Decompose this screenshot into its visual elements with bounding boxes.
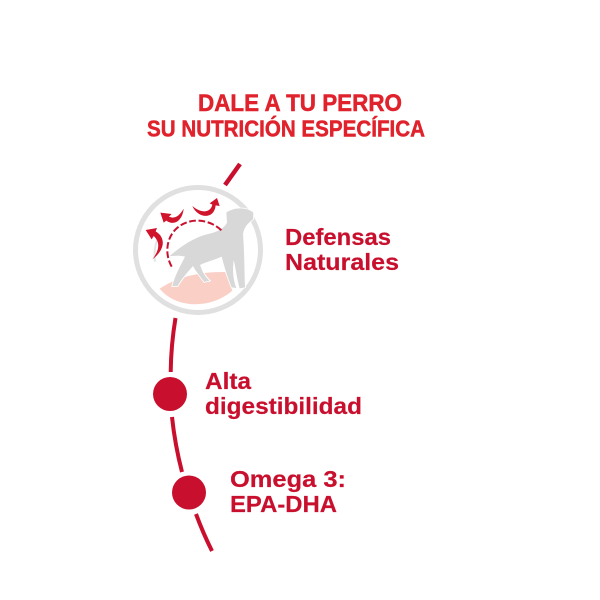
arrow 1 [146, 228, 163, 259]
timeline line: bottom segment [196, 514, 212, 551]
timeline line: lower segment [172, 417, 182, 472]
arrow 3 [192, 198, 220, 216]
label: Defensas Naturales [285, 224, 399, 275]
label: Alta digestibilidad [205, 368, 362, 419]
title [147, 90, 425, 142]
timeline line: middle segment [171, 318, 176, 372]
icon: dog with defenses [136, 188, 260, 312]
dog silhouette [170, 208, 253, 288]
bullet: Alta digestibilidad [153, 377, 187, 411]
title: SU NUTRICIÓN ESPECÍFICA [147, 114, 425, 142]
label: Defensas Naturales: Naturales [285, 249, 399, 275]
label: Omega 3 EPA-DHA [230, 466, 346, 517]
arrow 2 [160, 209, 184, 223]
label: Alta digestibilidad: digestibilidad [205, 393, 362, 419]
label: Omega 3 EPA-DHA: Omega 3: [230, 466, 346, 492]
inner ring arc [155, 234, 160, 262]
dashed arc [167, 221, 222, 267]
pink ground [160, 272, 232, 304]
title: DALE A TU PERRO [198, 90, 402, 117]
bullet: Omega 3 [172, 476, 206, 510]
label: Alta digestibilidad: Alta [205, 368, 252, 394]
label: Omega 3 EPA-DHA: EPA-DHA [230, 491, 337, 517]
label: Defensas Naturales: Defensas [285, 224, 391, 250]
icon ring [136, 188, 260, 312]
timeline line: top segment [225, 164, 240, 185]
